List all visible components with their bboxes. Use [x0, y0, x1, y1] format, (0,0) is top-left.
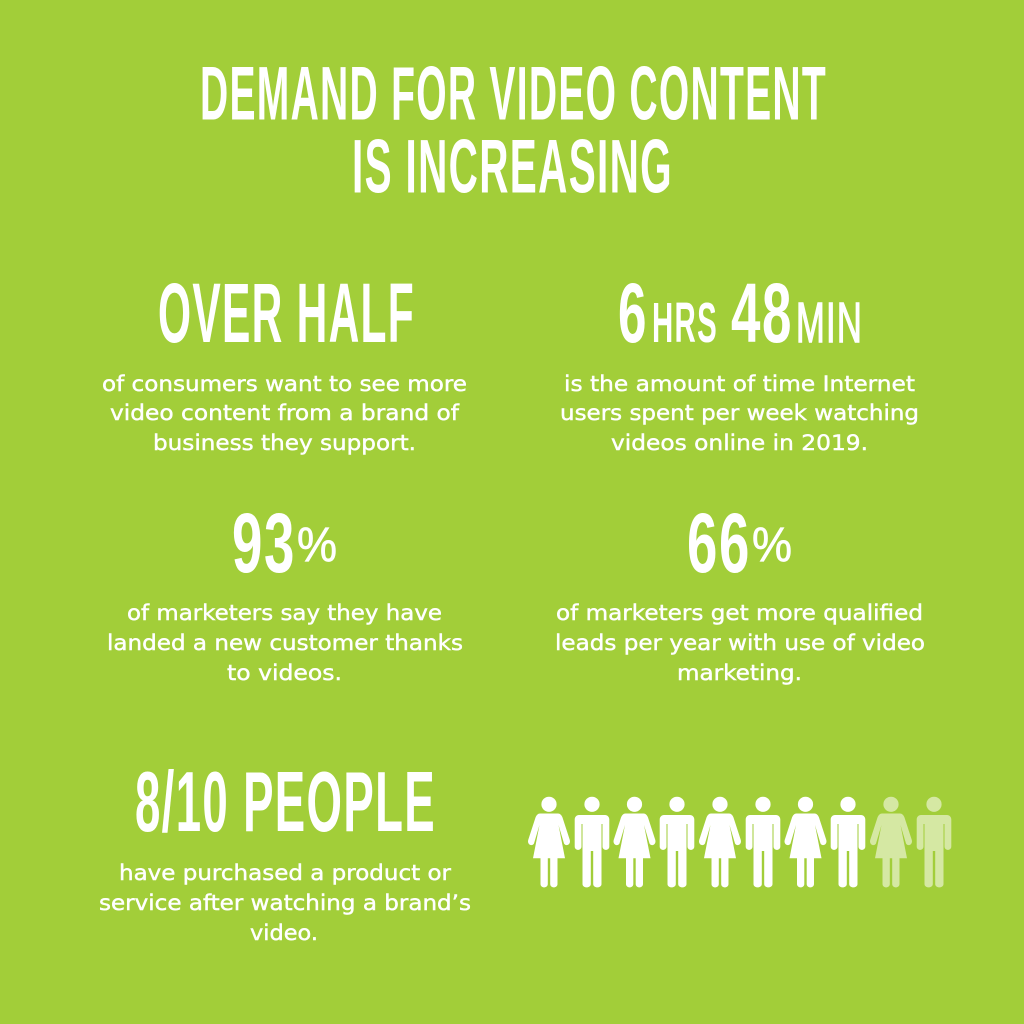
stat headline: 6 hrs 48 min: MIN: [796, 291, 863, 355]
pictogram: 8 of 10 people: [528, 797, 951, 887]
stat description: consumers: video content from a brand of: [110, 401, 459, 426]
icons: eight highlighted people: [528, 797, 865, 887]
stat description: new customer: [107, 601, 463, 686]
stat description: new customer: landed a new customer thanks: [107, 631, 463, 656]
stat description: consumers: of consumers want to see more: [102, 372, 467, 397]
stat headline: over half: OVER HALF: [158, 266, 415, 360]
stat description: new customer: of marketers say they have: [127, 601, 442, 626]
stat headline: 6 hrs 48 min: [618, 266, 863, 360]
stat description: purchased: [99, 861, 471, 946]
stat: 93 percent: [107, 496, 463, 686]
title: IS INCREASING: [352, 124, 673, 210]
stat description: consumers: business they support.: [153, 431, 416, 456]
stat: over half: [102, 266, 467, 456]
stat headline: 6 hrs 48 min: 48: [731, 266, 793, 360]
stat: watch time: [560, 266, 919, 456]
stat: 8 of 10 people: [99, 755, 471, 946]
stat description: qualified leads: marketing.: [677, 661, 802, 686]
stat headline: 93%: %: [297, 519, 337, 572]
stat description: purchased: video.: [250, 921, 318, 946]
stat headline: 66%: 66: [687, 496, 751, 590]
stat description: qualified leads: [555, 601, 925, 686]
stat description: consumers: [102, 372, 467, 456]
stat description: internet users: [560, 372, 919, 456]
stat description: internet users: users spent per week watching: [560, 401, 919, 426]
stat description: purchased: have purchased a product or: [119, 861, 451, 886]
icons: two faded people: [870, 797, 951, 887]
stat: 66 percent: [555, 496, 925, 686]
stat headline: 93%: 93: [232, 496, 296, 590]
stat headline: 6 hrs 48 min: 6: [618, 266, 648, 360]
stat headline: 6 hrs 48 min: HRS: [652, 291, 718, 355]
stat description: qualified leads: of marketers get more qualified: [556, 601, 923, 626]
stat description: internet users: is the amount of time Internet: [564, 372, 915, 397]
stat headline: 8/10 people: 8/10 PEOPLE: [135, 755, 436, 850]
stat headline: 66%: %: [752, 519, 792, 572]
stat description: qualified leads: leads per year with use of video: [555, 631, 925, 656]
stat description: purchased: service after watching a brand’s: [99, 891, 471, 916]
title: [200, 52, 827, 210]
stat description: new customer: to videos.: [227, 661, 342, 686]
stat description: internet users: videos online in 2019.: [611, 431, 868, 456]
